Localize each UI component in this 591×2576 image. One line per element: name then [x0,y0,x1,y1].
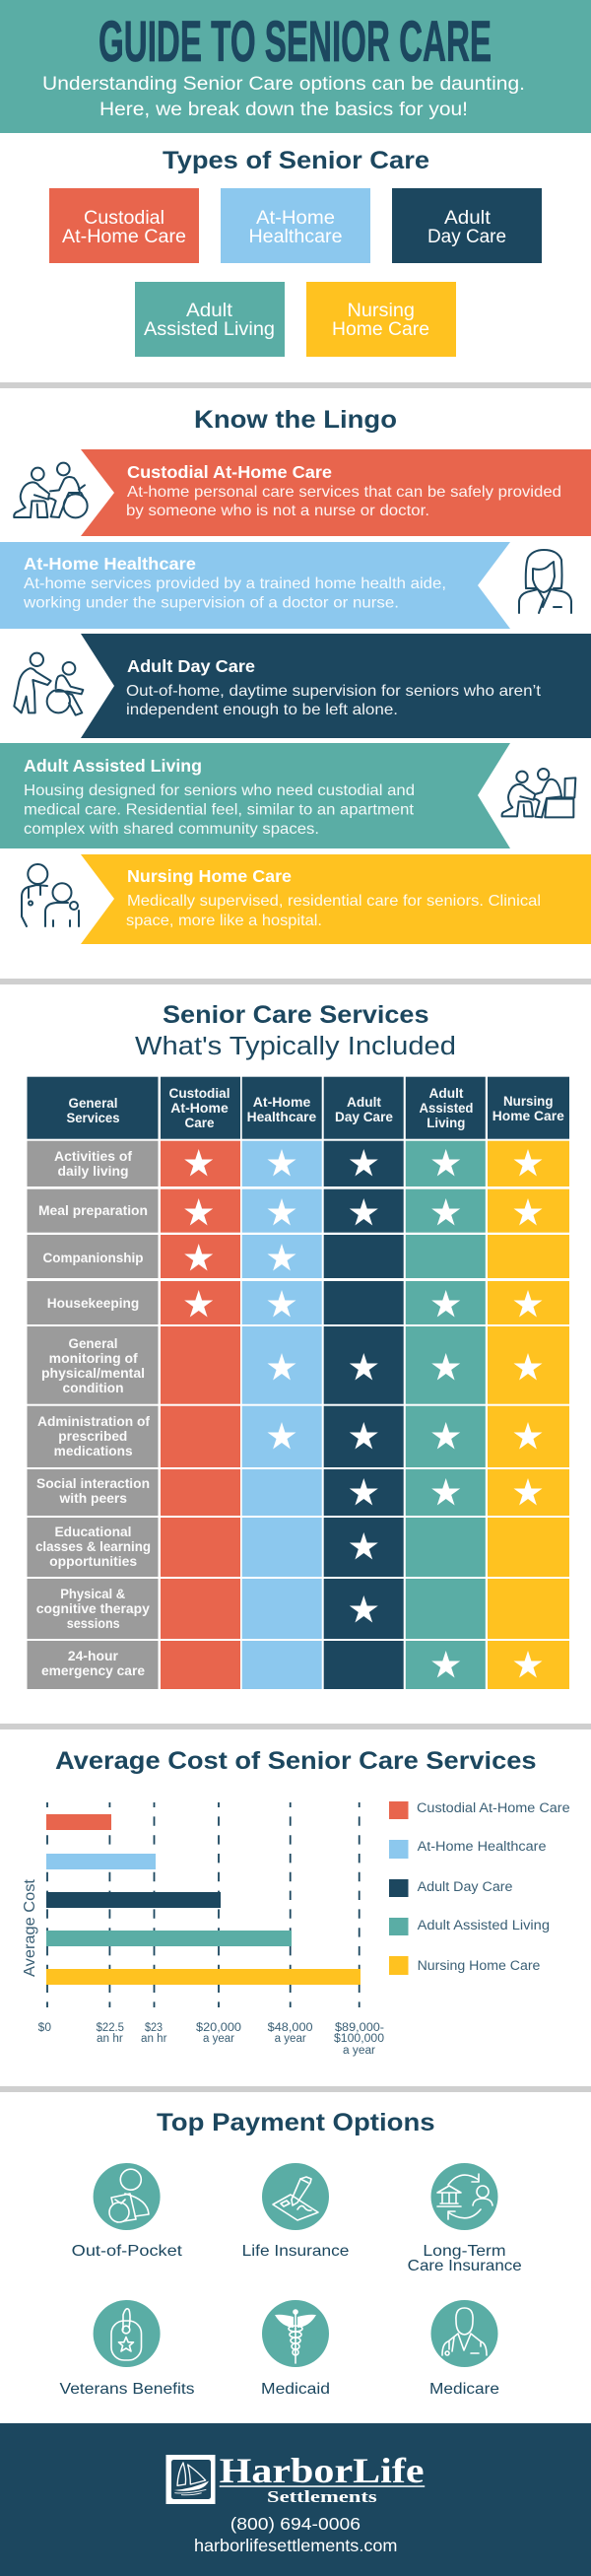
table: row labels: condition [63,1381,124,1395]
heading: types of senior care: Types of Senior Care [163,147,429,174]
table: row labels: Activities of [54,1149,133,1164]
table: header row: Adult [429,1086,464,1101]
table: header row: Healthcare [247,1110,317,1124]
icon: caregiver kneeling by wheelchair [14,463,88,517]
table: row labels: classes & learning [35,1539,151,1554]
table: row labels: physical/mental [41,1366,145,1381]
heading: senior care services: Senior Care Services [163,1001,429,1029]
axis labels: $89,000- [335,2022,384,2034]
icon: doctor with patient [22,864,79,926]
table: row labels: Administration of [37,1414,151,1429]
option: veterans benefits: Veterans Benefits [59,2381,195,2398]
axis labels: a year [275,2033,306,2045]
icon: caregiver pushing wheelchair [14,653,83,715]
table: row labels: Educational [55,1525,132,1539]
table: row labels: prescribed [58,1429,127,1444]
table: row labels: cognitive therapy [36,1601,150,1616]
table: header row: Nursing [503,1094,554,1109]
band: custodial at-home care [81,449,591,536]
band: at-home healthcare: At-Home Healthcare [24,554,196,574]
band: custodial at-home care: by someone who is not a nurse or doctor. [126,503,429,519]
table: included stars [184,1149,542,1677]
table: header row: Home Care [492,1109,564,1123]
band: at-home healthcare: At-home services provided by a trained home health aide, [24,576,446,592]
icon: nurse [519,550,571,613]
option: out-of-pocket [72,2163,182,2260]
option: life insurance: Life Insurance [242,2243,350,2260]
subtitle: Here, we break down the basics for you! [99,100,468,120]
icon: caregiver and senior in armchair [502,769,575,817]
band: adult assisted living [0,743,510,848]
band: nursing home care: Nursing Home Care [127,866,292,886]
panel: top payment options [59,2109,522,2398]
box: nursing home care: Home Care [332,319,429,340]
table: body columns [27,1141,570,1689]
table: row labels: Housekeeping [47,1296,139,1311]
header banner [0,0,591,133]
band: nursing home care [81,854,591,944]
subtitle [42,74,525,120]
heading: top payment options: Top Payment Options [157,2109,435,2136]
axis labels: $23 [145,2022,163,2034]
table: header row: Assisted [420,1101,473,1116]
band: at-home healthcare: working under the supervision of a doctor or nurse. [23,595,399,611]
box: adult assisted living: Adult [186,301,233,321]
option: out-of-pocket: Out-of-Pocket [72,2243,182,2260]
table: row labels: 24-hour [68,1649,119,1663]
table: header row: At-Home [170,1101,229,1116]
table: row labels: Companionship [43,1251,144,1265]
axis labels: an hr [97,2033,123,2045]
band: adult day care: Out-of-home, daytime supervision for seniors who aren’t [126,683,542,700]
table: row labels: emergency care [41,1663,145,1678]
panel: senior care services [27,1001,570,1689]
table: row labels: Physical & [60,1587,125,1601]
legend: Nursing Home Care [418,1958,540,1973]
legend: Custodial At-Home Care [417,1800,570,1815]
box: at-home healthcare: At-Home [256,208,335,229]
table: row labels: Meal preparation [38,1203,148,1218]
heading: average cost of senior care services: Average Cost of Senior Care Services [55,1747,537,1775]
box: adult day care: Day Care [427,227,506,247]
axis title: Average Cost [22,1878,38,1977]
table: row labels: Social interaction [36,1476,150,1491]
option: medicare [429,2300,499,2398]
panel: types of senior care [49,147,542,357]
table: header row: General [69,1096,118,1111]
band: adult assisted living: complex with shared community spaces. [24,821,319,838]
axis labels: $48,000 [268,2022,313,2034]
legend: Adult Day Care [418,1879,512,1894]
box: at-home healthcare: Healthcare [248,227,343,247]
bar chart [22,1802,384,2057]
logo: HarborLife Settlements: Settlements [267,2487,377,2506]
legend: At-Home Healthcare [418,1839,546,1854]
option: long-term care insurance: Long-Term [423,2243,506,2260]
table: header row: Living [427,1116,465,1130]
table: header row [28,1077,569,1139]
table: header row: Services [67,1111,120,1125]
band: adult assisted living: Adult Assisted Living [24,756,202,776]
band: adult assisted living: Housing designed for seniors who need custodial and [24,782,415,799]
axis labels: $20,000 [196,2022,241,2034]
table: header row: Care [185,1116,215,1130]
band: nursing home care: space, more like a hospital. [126,913,322,929]
box: custodial at-home care: At-Home Care [62,227,186,247]
table: row labels: monitoring of [49,1351,138,1366]
legend [389,1800,570,1975]
logo: HarborLife Settlements [165,2451,425,2506]
table: row labels: sessions [67,1616,120,1631]
legend: Adult Assisted Living [418,1918,550,1932]
box: custodial at-home care: Custodial [84,208,164,229]
table: row labels: with peers [58,1491,127,1506]
axis labels: a year [343,2045,375,2057]
band: adult assisted living: medical care. Residential feel, similar to an apartment [24,802,415,818]
axis labels: a year [203,2033,234,2045]
axis labels: $100,000 [334,2033,384,2045]
option: medicare: Medicare [429,2381,499,2398]
option: medicaid [261,2300,330,2398]
option: veterans benefits [59,2300,195,2398]
axis labels: an hr [141,2033,167,2045]
axis labels [38,2022,384,2057]
box: nursing home care: Nursing [347,301,415,321]
table: row labels: General [69,1336,118,1351]
icon: sailboat [174,2463,209,2495]
option: medicaid: Medicaid [261,2381,330,2398]
subtitle: Understanding Senior Care options can be daunting. [42,74,525,95]
box: adult assisted living [135,282,285,357]
axis labels: $22.5 [97,2022,124,2034]
band: at-home healthcare [0,542,510,629]
box: adult assisted living: Assisted Living [144,319,275,340]
box: adult day care [392,188,542,263]
subheading: what's typically included: What's Typically Included [135,1033,456,1060]
panel: know the lingo [0,406,591,944]
band: adult day care: Adult Day Care [127,656,255,676]
box: custodial at-home care [49,188,199,263]
band: adult day care [81,634,591,738]
contact details [194,2514,397,2555]
table: header row: Custodial [169,1086,230,1101]
table: row labels: opportunities [49,1554,137,1569]
table: header row: Adult [347,1095,381,1110]
option: long-term care insurance [408,2163,522,2274]
box: nursing home care [306,282,456,357]
option: long-term care insurance: Care Insurance [408,2258,522,2274]
contact details: harborlifesettlements.com [194,2536,397,2555]
contact details: (800) 694-0006 [230,2514,361,2534]
panel: average cost [22,1747,570,2057]
box: adult day care: Adult [444,208,492,229]
option: life insurance [242,2163,350,2260]
box: at-home healthcare [221,188,370,263]
band: nursing home care: Medically supervised, residential care for seniors. Clinical [127,893,541,910]
footer [0,2423,591,2576]
table: header row: At-Home [253,1095,311,1110]
axis labels: $0 [38,2022,51,2034]
table: row labels [35,1149,151,1678]
logo: HarborLife Settlements: HarborLife [220,2451,425,2490]
band: custodial at-home care: Custodial At-Home Care [127,462,332,482]
table: row labels: medications [54,1444,133,1458]
band: adult day care: independent enough to be left alone. [126,702,398,718]
band: custodial at-home care: At-home personal care services that can be safely provided [127,484,561,501]
heading: know the lingo: Know the Lingo [194,406,397,434]
table: header row: Day Care [335,1110,393,1124]
table: row labels: daily living [57,1164,128,1179]
